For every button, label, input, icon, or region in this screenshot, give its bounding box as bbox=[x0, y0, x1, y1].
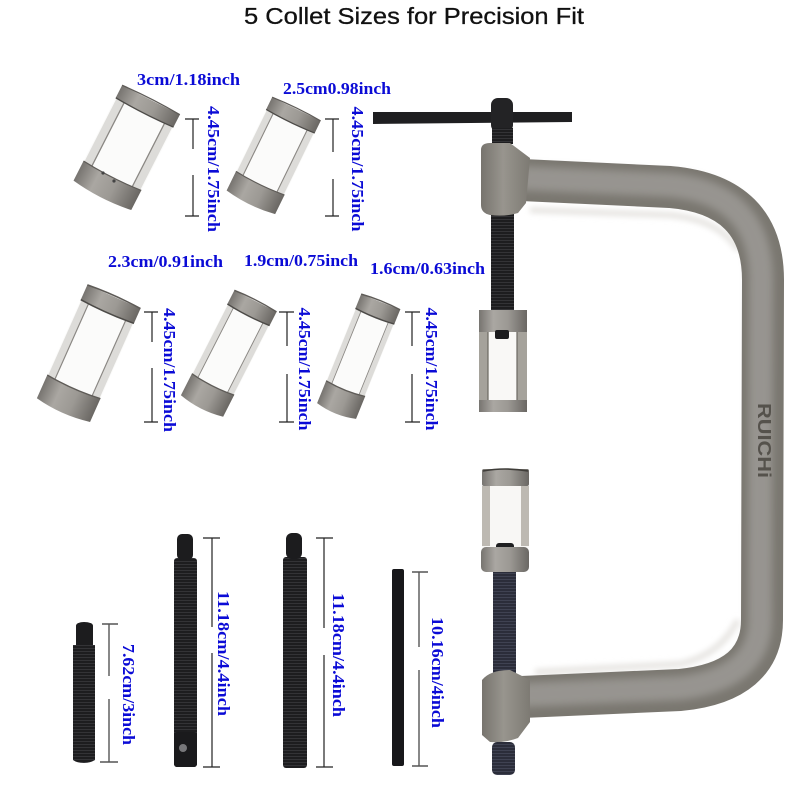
brand text: RUICHi bbox=[754, 403, 774, 478]
plain rod 10.16cm bbox=[392, 569, 447, 766]
collet 2.3cm: 4.45cm/1.75inch bbox=[160, 308, 179, 432]
title: 5 Collet Sizes for Precision Fit bbox=[244, 3, 585, 29]
valve spring compressor tool bbox=[373, 98, 774, 775]
handle stem bbox=[491, 98, 513, 144]
collet 1.6cm: 4.45cm/1.75inch bbox=[422, 308, 441, 430]
upper screw bbox=[491, 210, 514, 311]
C-frame bbox=[522, 178, 763, 697]
collet 1.6cm: 1.6cm/0.63inch bbox=[370, 259, 485, 278]
collet 3cm: 4.45cm/1.75inch bbox=[204, 106, 223, 232]
mounted upper collet bbox=[479, 310, 527, 412]
collet 2.3cm bbox=[36, 252, 223, 432]
upper collar bbox=[481, 143, 530, 216]
T-handle bar bbox=[373, 112, 572, 124]
plain rod 10.16cm: 10.16cm/4inch bbox=[428, 617, 447, 728]
threaded rod 7.62cm bbox=[73, 622, 138, 763]
threaded rod 11.18cm with hole bbox=[174, 534, 233, 767]
mounted lower collet bbox=[481, 469, 529, 572]
collet 1.9cm: 1.9cm/0.75inch bbox=[244, 251, 358, 270]
collet 2.5cm bbox=[226, 79, 391, 232]
collet 2.5cm: 2.5cm0.98inch bbox=[283, 79, 391, 98]
collet 1.6cm bbox=[316, 259, 485, 430]
collet 1.9cm bbox=[180, 251, 358, 430]
arm shadows bbox=[380, 128, 738, 672]
lower screw tip bbox=[492, 742, 515, 775]
threaded rod 11.18cm with hole: 11.18cm/4.4inch bbox=[214, 591, 233, 716]
collet 2.5cm: 4.45cm/1.75inch bbox=[348, 106, 367, 232]
threaded rod 11.18cm bbox=[283, 533, 348, 768]
threaded rod 11.18cm: 11.18cm/4.4inch bbox=[329, 593, 348, 717]
collet 3cm: 3cm/1.18inch bbox=[137, 70, 240, 89]
collet 1.9cm: 4.45cm/1.75inch bbox=[295, 308, 314, 430]
collet 3cm bbox=[72, 70, 240, 232]
lower collar bbox=[482, 670, 530, 742]
lower screw bbox=[493, 572, 516, 678]
threaded rod 7.62cm: 7.62cm/3inch bbox=[119, 644, 138, 745]
collet 2.3cm: 2.3cm/0.91inch bbox=[108, 252, 223, 271]
